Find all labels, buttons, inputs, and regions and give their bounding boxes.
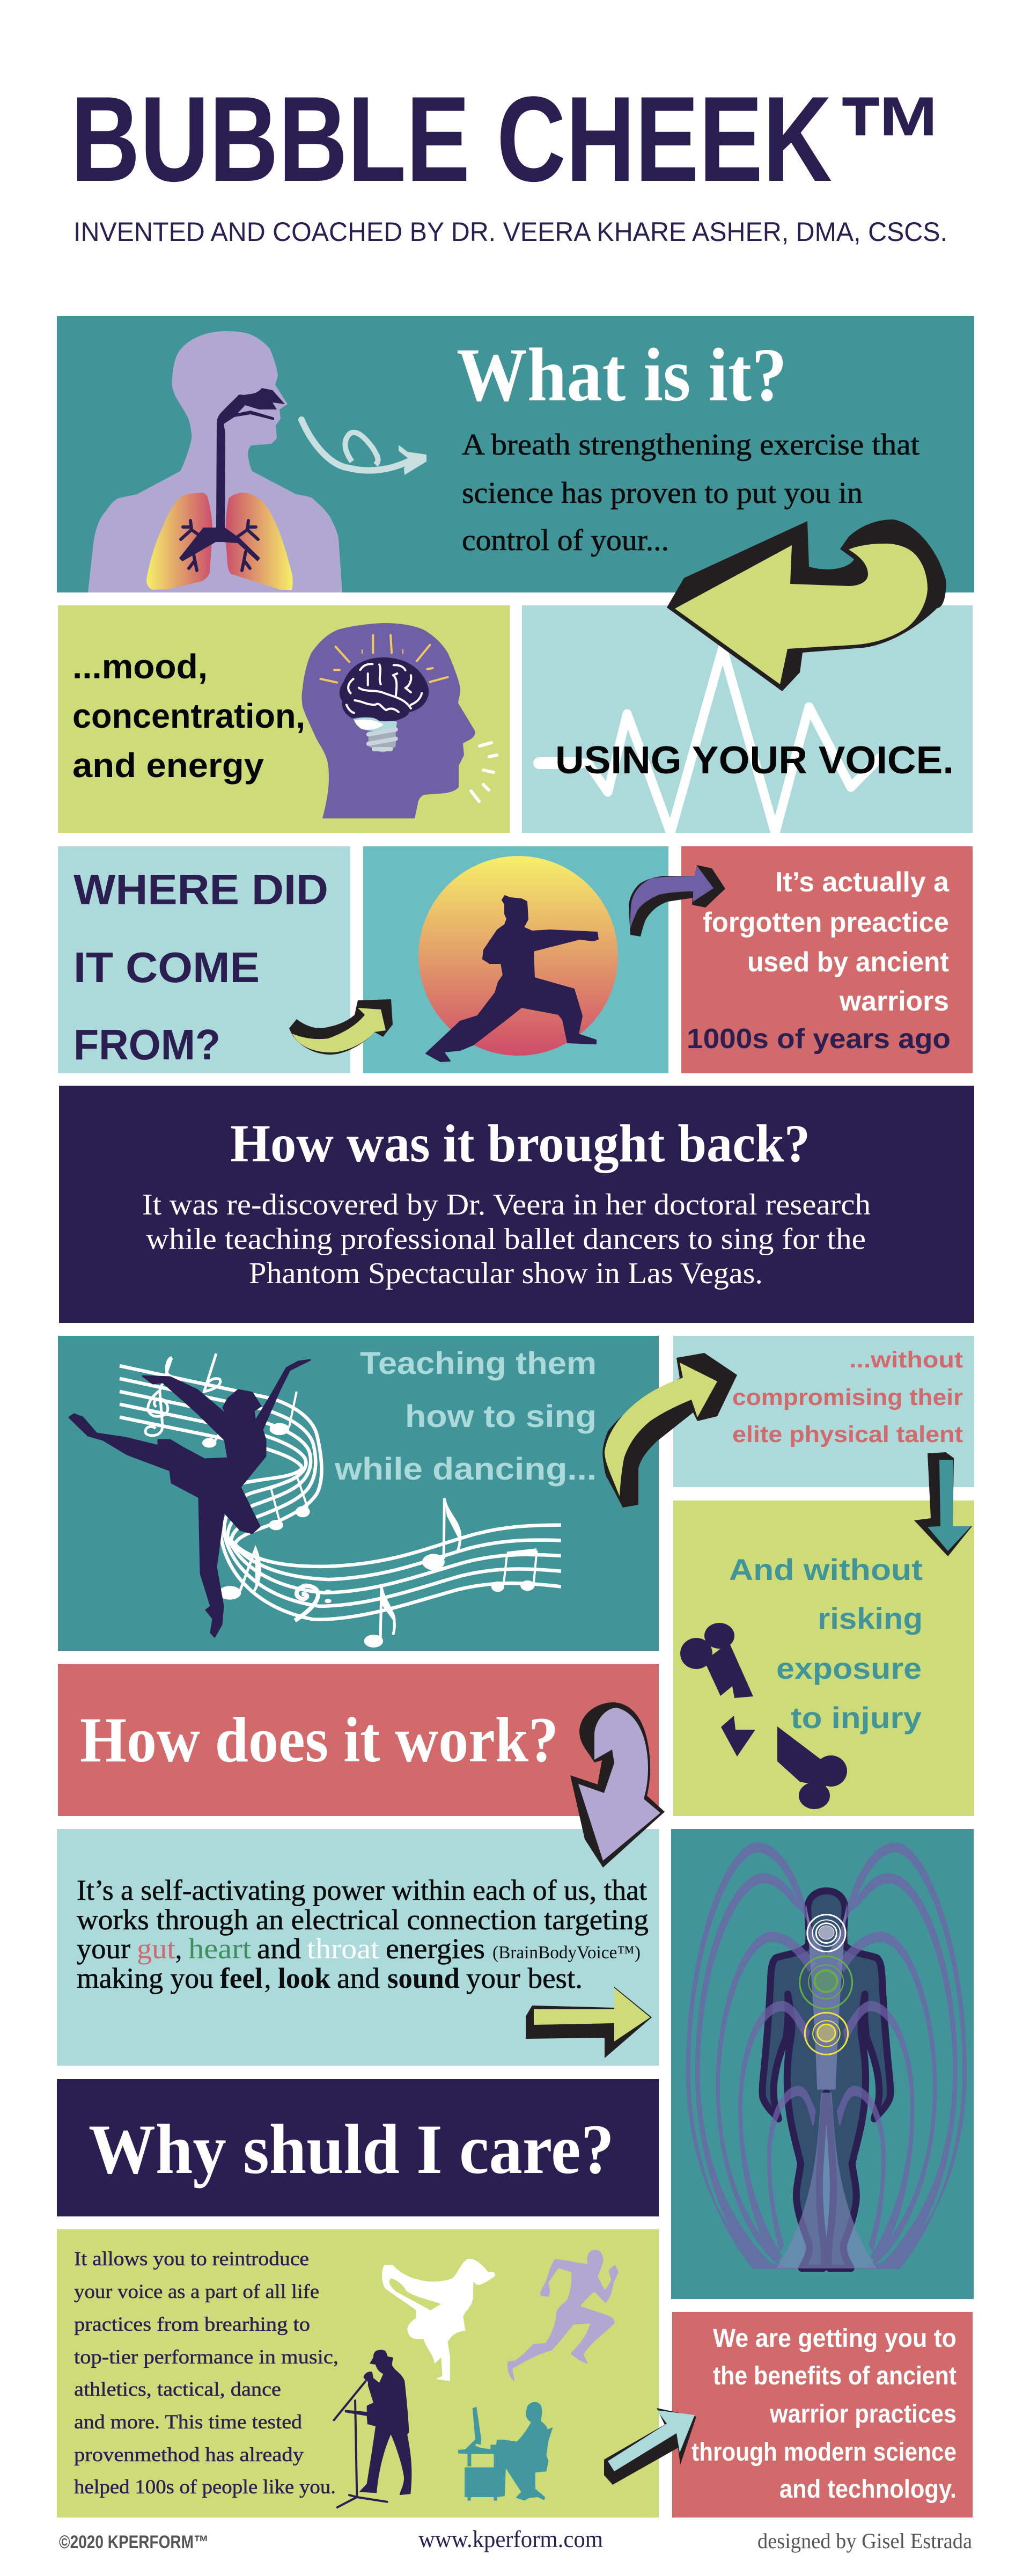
text: forgotten practice [687,867,951,1055]
text: modern science: the benefits of ancient [713,2362,957,2390]
panel: ancient warriors [681,846,973,1073]
heading: where did it come from: FROM? [73,1021,220,1069]
text: modern science: We are getting you to [713,2324,957,2353]
icon: runner [507,2250,619,2382]
text: definition [462,428,919,557]
text: mood concentration energy: concentration, [72,697,305,735]
panel: without compromising [673,1336,974,1487]
icon: music staff and notes [120,1353,561,1647]
text: explanation paragraph [77,1874,649,1994]
text: life practices paragraph [74,2248,339,2498]
text: life practices paragraph: helped 100s of people like you. [74,2476,336,2498]
text: modern science: through modern science [691,2438,957,2467]
arrow: purple arrow [629,865,725,936]
text: definition: control of your... [462,524,669,557]
text: definition: science has proven to put you in [462,477,863,510]
icon: human body energy figure [687,1843,966,2268]
text: explanation paragraph: , [264,1962,271,1994]
arrow: lavender down arrow [570,1702,665,1868]
text: life practices paragraph: provenmethod has already [74,2444,304,2466]
subtitle: INVENTED AND COACHED BY DR. VEERA KHARE ASHER, DMA, CSCS. [73,217,947,247]
text: explanation paragraph: works through an electrical connection targeting [77,1904,649,1936]
text: life practices paragraph: athletics, tactical, dance [74,2379,281,2401]
title: ™ [836,71,946,207]
text: rediscovery story: while teaching professional ballet dancers to sing for the [146,1223,866,1256]
text: explanation paragraph: your [77,1933,130,1965]
text: rediscovery story: It was re-discovered by Dr. Veera in her doctoral research [142,1188,871,1221]
panel: teaching dancers [58,1336,659,1651]
text: life practices paragraph: top-tier performance in music, [74,2346,339,2368]
panel: modern science [672,2312,973,2518]
text: rediscovery story: Phantom Spectacular show in Las Vegas. [249,1257,763,1290]
text: without risking injury: And without [729,1553,923,1586]
text: definition: A breath strengthening exercise that [462,428,919,462]
text: explanation paragraph: and [337,1962,380,1994]
text: explanation paragraph: your best. [466,1962,583,1994]
text: without risking injury [729,1553,923,1735]
text: teaching them how to sing [334,1346,597,1487]
panel: how it works explanation [57,1829,659,2066]
footer [59,2526,972,2553]
panel: using your voice [522,605,973,833]
text: using your voice: USING YOUR VOICE. [555,739,954,782]
text: explanation paragraph: heart [188,1933,251,1965]
icon: broken bone [680,1623,847,1809]
text: teaching them how to sing: while dancing... [334,1452,597,1487]
panel: warrior [363,846,668,1073]
text: mood concentration energy: ...mood, [72,647,208,686]
text: rediscovery story [142,1188,871,1290]
arrow: large lime curved arrow [602,1353,737,1507]
text: teaching them how to sing: how to sing [405,1399,597,1434]
text: life practices paragraph: It allows you to reintroduce [74,2248,309,2270]
panel: energy body [671,1829,974,2299]
text: mood concentration energy [72,647,305,785]
heading: how was it brought back: How was it brought back? [230,1114,810,1173]
text: without compromising: ...without [849,1347,963,1373]
panel: where did it come from [58,846,350,1073]
text: without compromising [732,1347,963,1447]
text: without risking injury: exposure [776,1651,922,1685]
arrow: teal down arrow [914,1452,972,1556]
icon: voice waveform [539,648,880,833]
panel: without injury [673,1501,974,1816]
text: without risking injury: to injury [791,1701,922,1735]
icon: desk worker [458,2402,553,2501]
text: modern science: warrior practices [769,2400,957,2428]
text: modern science: and technology. [779,2475,957,2504]
arrow: small lime arrow [289,999,393,1055]
text: forgotten practice: used by ancient [747,947,949,978]
panel: life practices [57,2229,659,2518]
heading: where did it come from: IT COME [73,943,260,991]
text: life practices paragraph: and more. This time tested [74,2411,303,2433]
icon: gradient sun [418,856,618,1056]
text: explanation paragraph: gut [137,1933,175,1965]
text: modern science [691,2324,957,2504]
text: explanation paragraph: and [257,1933,301,1965]
panel: mood [58,605,510,833]
panel: how does it work [58,1664,659,1816]
title: BUBBLE CHEEK [71,71,832,207]
heading: where did it come from [73,866,328,1069]
text: explanation paragraph: (BrainBodyVoice™) [492,1943,641,1963]
text: explanation paragraph: energies [386,1933,485,1965]
text: explanation paragraph: It’s a self-activating power within each of us, that [77,1874,647,1906]
heading: where did it come from: WHERE DID [73,866,328,913]
icon: head with brain bulb [301,623,497,818]
footer: website: www.kperform.com [418,2526,603,2552]
arrow: big lime return arrow [667,519,946,691]
text: without risking injury: risking [818,1601,923,1635]
text: without compromising: compromising their [732,1385,963,1410]
icon: breakdancer [382,2259,495,2381]
text: explanation paragraph: sound [387,1962,460,1994]
heading: why should I care: Why shuld I care? [89,2110,614,2189]
text: explanation paragraph: , [175,1933,182,1965]
panel: why should I care [57,2079,659,2216]
text: explanation paragraph: making you [77,1962,214,1994]
footer: designer credit: designed by Gisel Estrada [757,2529,972,2553]
arrow: lime right arrow [526,1987,652,2058]
heading: what is it: What is it? [457,332,787,417]
icon: activity silhouettes [334,2250,619,2507]
icon: warrior silhouette [426,896,598,1062]
heading: how does it work: How does it work? [80,1704,558,1775]
icon: ballerina silhouette [69,1360,310,1637]
text: explanation paragraph: look [278,1962,330,1994]
text: without compromising: elite physical talent [732,1422,963,1447]
text: mood concentration energy: and energy [72,746,264,785]
text: forgotten practice: 1000s of years ago [687,1023,951,1055]
icon: singer [334,2350,411,2507]
text: forgotten practice: It’s actually a [775,867,950,898]
arrow: light blue diagonal arrow [604,2408,696,2485]
text: explanation paragraph: throat [307,1933,379,1965]
panel: what is it [57,316,974,592]
text: teaching them how to sing: Teaching them [360,1346,597,1381]
text: forgotten practice: forgotten preactice [703,907,949,938]
text: life practices paragraph: practices from brearhing to [74,2314,310,2336]
text: explanation paragraph: feel [220,1962,263,1994]
text: life practices paragraph: your voice as a part of all life [74,2281,319,2303]
footer: copyright: ©2020 KPERFORM™ [59,2532,209,2552]
text: forgotten practice: warriors [839,986,949,1017]
icon: respiratory figure [88,331,342,592]
icon: breath arrow [301,420,426,475]
panel: how was it brought back [59,1086,974,1323]
